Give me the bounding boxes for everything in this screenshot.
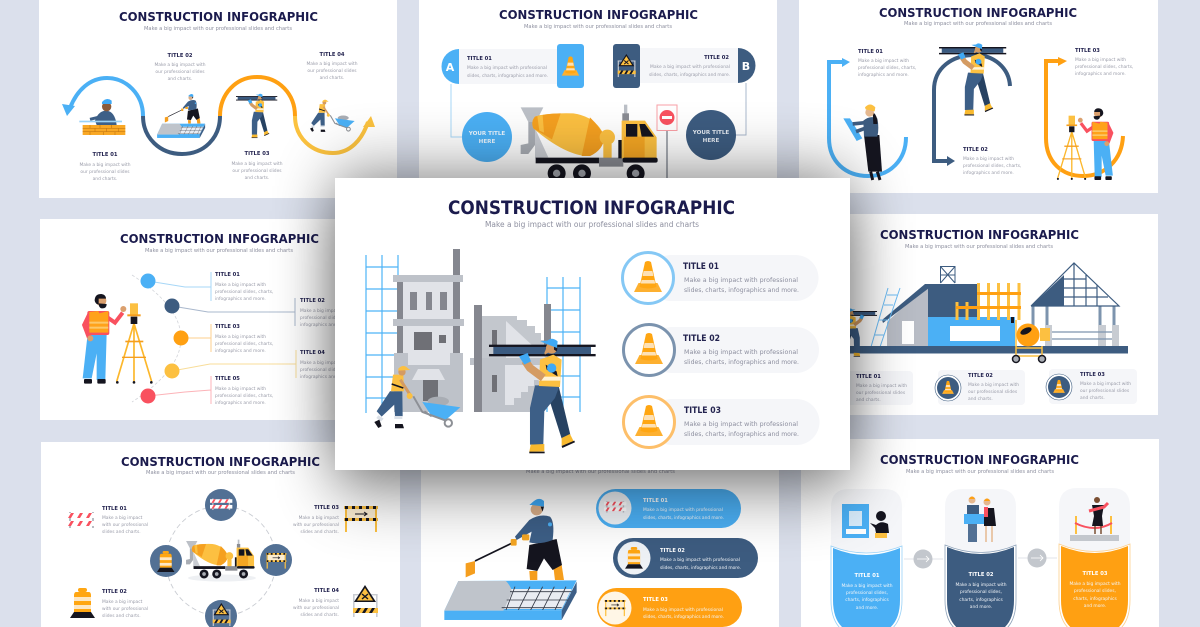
right scaffold (547, 277, 580, 412)
blue circle: HERE (479, 139, 495, 145)
text block: title 02: Make a big impact with (963, 156, 1014, 162)
text block: title 04 (300, 350, 358, 380)
card 2 (945, 489, 1016, 627)
node: barricade (260, 544, 292, 576)
text block: title 03 (231, 151, 283, 181)
item: title 01: Make a big impact with professional (684, 277, 798, 284)
item card 1: our professional slides (856, 390, 906, 396)
text block: title 02: infographics and more. (300, 322, 351, 328)
text block: title 03: Make a big impact with (215, 334, 266, 340)
text block: title 03: TITLE 03 (215, 324, 240, 330)
node: warning (205, 600, 237, 627)
pill title 01 (596, 489, 741, 528)
option B pill: Make a big impact with professional (650, 64, 730, 70)
stairwell building (470, 304, 551, 412)
drop shadow of central slide (335, 186, 850, 478)
pill title 01: TITLE 01 (643, 498, 668, 504)
text block: title 05: professional slides, charts, (215, 393, 273, 399)
item card 1: TITLE 01 (856, 374, 881, 380)
card 1: professional slides, (846, 590, 888, 596)
text block: title 01: Make a big impact with (79, 162, 131, 168)
text block: title 04: Make a big impact with (300, 360, 351, 366)
item card 3 (1046, 369, 1137, 404)
item: title 03: TITLE 03 (684, 406, 721, 416)
worker with wheelbarrow (374, 366, 460, 428)
orange node (174, 330, 188, 346)
text block: title 04: infographics and more. (300, 374, 351, 380)
item card 2: our professional slides (968, 389, 1018, 395)
text block: title 04: with our professional (293, 605, 339, 611)
text block: title 03: Make a big impact with (231, 161, 283, 167)
cement truck (521, 105, 658, 182)
option B pill (613, 44, 755, 88)
navy circle (686, 110, 736, 160)
navy circle: YOUR TITLE (692, 130, 729, 136)
slide 3 subtitle: Make a big impact with our professional slides and charts (904, 21, 1052, 27)
main subtitle: Make a big impact with our professional slides and charts (485, 220, 699, 229)
worker paving concrete (157, 94, 205, 138)
slide 8 title: CONSTRUCTION INFOGRAPHIC (880, 453, 1079, 468)
slide 6 title: CONSTRUCTION INFOGRAPHIC (121, 455, 320, 470)
panel: slide 8 three step cards (801, 439, 1159, 627)
icon: barrel (70, 588, 95, 618)
text block: title 01: TITLE 01 (93, 152, 118, 158)
red node (140, 388, 156, 404)
slide 4 subtitle: Make a big impact with our professional slides and charts (145, 248, 293, 254)
text block: title 03: Make a big impact (299, 515, 339, 521)
text block: title 02 (102, 589, 148, 619)
text block: title 03: TITLE 03 (1075, 48, 1100, 54)
cement mixer (1011, 317, 1050, 362)
text block: title 01: infographics and more. (858, 72, 909, 78)
pill title 02: Make a big impact with professional (660, 557, 740, 563)
pill title 02: slides, charts, infographics and more. (660, 565, 741, 571)
slide 7 subtitle: Make a big impact with our professional slides and charts (526, 469, 675, 475)
text block: title 02: Make a big impact (102, 599, 143, 605)
item card 2: TITLE 02 (968, 373, 993, 379)
text block: title 02: TITLE 02 (102, 589, 127, 595)
navy node (164, 298, 180, 314)
text block: title 01: Make a big impact (102, 515, 143, 521)
text block: title 01: TITLE 01 (215, 272, 240, 278)
text block: title 02: professional slides, charts, (300, 315, 358, 321)
option A pill: slides, charts, infographics and more. (467, 73, 548, 79)
text block: title 02: infographics and more. (963, 170, 1014, 176)
yellow node (164, 364, 180, 378)
text block: title 02: TITLE 02 (168, 53, 193, 59)
main title: CONSTRUCTION INFOGRAPHIC (448, 198, 735, 219)
text block: title 05 (215, 376, 273, 406)
text block: title 01: infographics and more. (215, 296, 266, 302)
slide 2 title: CONSTRUCTION INFOGRAPHIC (499, 8, 698, 23)
text block: title 03: infographics and more. (215, 348, 266, 354)
text block: title 04: Make a big impact (299, 598, 339, 604)
item card 3: TITLE 03 (1080, 372, 1105, 378)
text block: title 01: TITLE 01 (858, 49, 883, 55)
option A pill: Make a big impact with professional (467, 65, 547, 71)
item: title 02: slides, charts, infographics and more. (684, 359, 799, 366)
text block: title 04: professional slides, charts, (300, 367, 358, 373)
text block: title 04: our professional slides (307, 68, 357, 74)
surveyor with tripod (1057, 108, 1113, 180)
icon: barrier (66, 512, 97, 528)
truck ground shadow (188, 574, 256, 582)
text block: title 04: and charts. (320, 75, 344, 81)
blue circle (462, 112, 512, 162)
text block: title 02 (300, 298, 358, 328)
panel: slide 1 snake path timeline (39, 0, 397, 198)
card 3: professional slides, (1074, 588, 1116, 594)
panel: slide 6 ring around truck (41, 442, 400, 627)
item card 3: Make a big impact with (1080, 381, 1131, 387)
text block: title 05: infographics and more. (215, 400, 266, 406)
text block: title 01: professional slides, charts, (858, 65, 916, 71)
text block: title 03: TITLE 03 (314, 505, 339, 511)
option A pill: TITLE 01 (467, 56, 492, 62)
panel: slide 2 cement mixer A/B (419, 0, 777, 188)
orange arrow (1046, 57, 1123, 176)
item: title 01 (622, 252, 818, 304)
slide 1 title: CONSTRUCTION INFOGRAPHIC (119, 10, 318, 25)
slide 8 subtitle: Make a big impact with our professional slides and charts (906, 469, 1054, 475)
option B pill: slides, charts, infographics and more. (649, 72, 730, 78)
text block: title 02: with our professional (102, 606, 148, 612)
text block: title 02: professional slides, charts, (963, 163, 1021, 169)
text block: title 01 (79, 152, 131, 182)
worker carrying beam (236, 94, 277, 138)
text block: title 01: slides and charts. (102, 529, 141, 535)
option A pill: A (446, 61, 455, 74)
text block: title 03: Make a big impact with (1075, 57, 1126, 63)
card 3: charts, infographics (1073, 596, 1117, 602)
option B pill: B (742, 60, 750, 73)
text block: title 03: TITLE 03 (245, 151, 270, 157)
card 1: and more. (856, 605, 878, 611)
text block: title 03: with our professional (293, 522, 339, 528)
item: title 01: slides, charts, infographics and more. (684, 287, 799, 294)
item card 1 (840, 371, 913, 405)
pill title 01: slides, charts, infographics and more. (643, 515, 724, 521)
card 3: Make a big impact with (1069, 581, 1121, 587)
item: title 02: TITLE 02 (683, 334, 720, 344)
worker with wheelbarrow (310, 100, 355, 132)
item card 3: our professional slides (1080, 388, 1130, 394)
cement truck (186, 540, 255, 578)
panel: slide 4 surveyor timeline (40, 219, 358, 420)
navy arrow (934, 55, 1010, 166)
text block: title 02: Make a big impact with (154, 62, 206, 68)
slide 1 subtitle: Make a big impact with our professional slides and charts (144, 26, 292, 32)
item: title 01: TITLE 01 (683, 262, 719, 272)
item: title 03 (624, 396, 820, 448)
slide 6 subtitle: Make a big impact with our professional slides and charts (146, 470, 295, 476)
item card 2: and charts. (968, 396, 993, 402)
item: title 02: Make a big impact with professional (684, 349, 798, 356)
text block: title 01: professional slides, charts, (215, 289, 273, 295)
panel: slide 3 arch arrows (799, 0, 1158, 193)
item card 2 (935, 370, 1025, 405)
text block: title 01 (215, 272, 273, 302)
worker carrying steel beam (489, 339, 596, 453)
item: title 02 (624, 324, 819, 376)
text block: title 04 (293, 588, 339, 618)
left scaffold (366, 255, 398, 413)
text block: title 02: Make a big impact with (300, 308, 351, 314)
item card 1: and charts. (856, 397, 881, 403)
dashed arc (132, 275, 181, 402)
card 1: charts, infographics (845, 597, 889, 603)
card 2: charts, infographics (959, 597, 1003, 603)
text block: title 03: and charts. (245, 175, 269, 181)
text block: title 01: our professional slides (80, 169, 130, 175)
text block: title 02: TITLE 02 (300, 298, 325, 304)
card 3 (1059, 488, 1130, 627)
pill title 02: TITLE 02 (660, 548, 685, 554)
woman with plans (843, 104, 882, 180)
worker carrying beam (939, 43, 1006, 115)
text block: title 03: our professional slides (232, 168, 282, 174)
card 2: TITLE 02 (969, 572, 994, 578)
text block: title 02: slides and charts. (102, 613, 141, 619)
slide 5 subtitle: Make a big impact with our professional slides and charts (905, 244, 1053, 250)
slide 5 title: CONSTRUCTION INFOGRAPHIC (880, 228, 1079, 243)
text block: title 04: TITLE 04 (314, 588, 339, 594)
concrete tower building (393, 249, 464, 412)
text block: title 03: slides and charts. (300, 529, 339, 535)
card 1 (831, 489, 902, 627)
text block: title 01 (858, 49, 916, 78)
ground slab (848, 346, 1128, 354)
text block: title 03: professional slides, charts, (215, 341, 273, 347)
text block: title 05: Make a big impact with (215, 386, 266, 392)
text block: title 04: TITLE 04 (300, 350, 325, 356)
option A pill (442, 44, 584, 88)
surveyor with tripod (83, 294, 153, 384)
node: barrel (150, 545, 182, 577)
icon: warning sign (353, 585, 378, 617)
node: barrier (205, 489, 237, 521)
item: title 03: slides, charts, infographics and more. (684, 431, 799, 438)
text block: title 02: TITLE 02 (963, 147, 988, 153)
text block: title 03 (293, 505, 339, 535)
blue circle: YOUR TITLE (468, 131, 505, 137)
worker paving concrete (444, 499, 577, 620)
card 3: TITLE 03 (1083, 571, 1108, 577)
panel: slide 7 paving worker with pills (421, 455, 779, 627)
pill title 03: slides, charts, infographics and more. (643, 614, 724, 620)
text block: title 03 (1075, 48, 1133, 77)
item card 3: and charts. (1080, 395, 1105, 401)
text block: title 03: professional slides, charts, (1075, 64, 1133, 70)
item: title 03: Make a big impact with professional (684, 421, 798, 428)
icon: barricade (344, 506, 378, 532)
pill title 01: Make a big impact with professional (643, 507, 723, 513)
text block: title 04 (306, 52, 358, 81)
pill title 02 (613, 538, 758, 578)
text block: title 02 (154, 53, 206, 82)
text block: title 01: TITLE 01 (102, 506, 127, 512)
item card 2: Make a big impact with (968, 382, 1019, 388)
option B pill: TITLE 02 (704, 55, 729, 61)
connector lines (148, 272, 296, 404)
worker carrying beam (832, 309, 877, 357)
card 1: TITLE 01 (855, 573, 880, 579)
slide 3 title: CONSTRUCTION INFOGRAPHIC (879, 6, 1077, 21)
item card 1: Make a big impact with (856, 383, 907, 389)
text block: title 01: Make a big impact with (858, 58, 909, 64)
navy circle: HERE (703, 138, 719, 144)
open frame house (1031, 263, 1119, 346)
card 2: Make a big impact with (955, 582, 1007, 588)
text block: title 01: Make a big impact with (215, 282, 266, 288)
text block: title 02 (963, 147, 1021, 176)
text block: title 02: our professional slides (155, 69, 205, 75)
slide 2 subtitle: Make a big impact with our professional slides and charts (524, 24, 672, 30)
card 1: Make a big impact with (841, 583, 893, 589)
house being built (871, 266, 1021, 347)
text block: title 01 (102, 506, 148, 535)
dashed ring (166, 506, 276, 616)
flow connectors (904, 548, 1057, 568)
text block: title 01: with our professional (102, 522, 148, 528)
panel: slide 5 houses under construction (830, 214, 1158, 415)
blue node (140, 274, 156, 288)
pill title 03: TITLE 03 (643, 597, 668, 603)
mason at brick wall (79, 99, 125, 135)
pill title 03 (597, 588, 742, 627)
text block: title 05: TITLE 05 (215, 376, 240, 382)
text block: title 02: and charts. (168, 76, 192, 82)
connectors (451, 83, 746, 137)
blue arrow (829, 58, 906, 176)
card 3: and more. (1084, 603, 1106, 609)
card 2: professional slides, (960, 589, 1002, 595)
text block: title 04: TITLE 04 (320, 52, 345, 58)
text block: title 03: infographics and more. (1075, 71, 1126, 77)
text block: title 04: slides and charts. (300, 612, 339, 618)
text block: title 04: Make a big impact with (306, 61, 358, 67)
no entry sign (657, 105, 677, 180)
snake arrow path (62, 77, 375, 154)
pill title 03: Make a big impact with professional (643, 607, 723, 613)
text block: title 03 (215, 324, 273, 354)
panel: central slide (335, 178, 850, 470)
slide 4 title: CONSTRUCTION INFOGRAPHIC (120, 232, 319, 247)
text block: title 01: and charts. (93, 176, 117, 182)
card 2: and more. (970, 604, 992, 610)
